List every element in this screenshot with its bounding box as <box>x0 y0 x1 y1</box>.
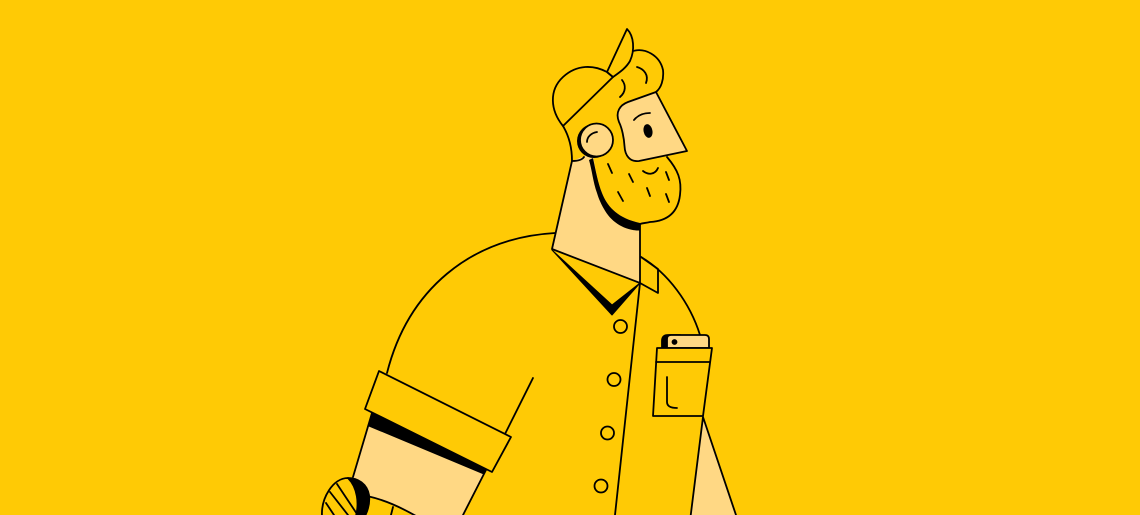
face <box>618 92 687 161</box>
hand with striped fingers <box>322 478 369 515</box>
shirt buttons <box>594 320 627 492</box>
beard shadow band <box>589 158 640 231</box>
collar <box>552 250 658 315</box>
sleeve shadow band <box>369 413 487 474</box>
ear <box>577 124 613 158</box>
eye and eyebrow <box>634 113 653 138</box>
phone in pocket <box>662 335 709 348</box>
right arm <box>690 417 738 515</box>
shirt pocket <box>653 348 712 416</box>
hair <box>563 50 663 161</box>
wrist and palm <box>362 496 416 515</box>
left forearm <box>353 413 487 515</box>
rolled sleeve cuff <box>365 371 511 472</box>
beard outline <box>640 157 680 224</box>
mouth <box>643 168 658 174</box>
beard stubble <box>608 164 669 202</box>
beard fill <box>593 150 680 223</box>
neck <box>552 150 640 283</box>
body and shirt <box>387 233 700 515</box>
cap <box>553 29 633 126</box>
